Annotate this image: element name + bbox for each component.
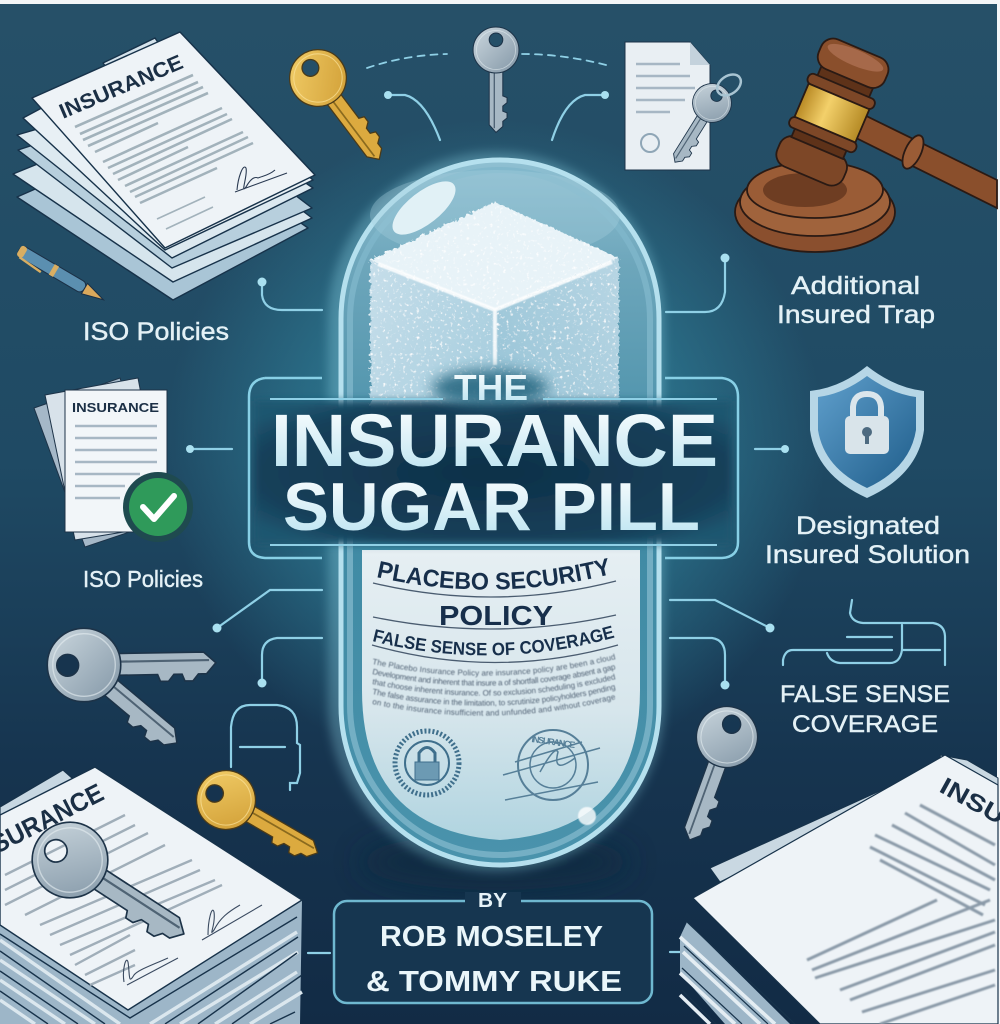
author panel: & TOMMY RUKE [366,966,622,998]
connector end dots [186,91,789,690]
icon: insurance document with check [34,378,193,547]
label: Additional Insured Trap [777,272,935,329]
label: Additional Insured Trap: Insured Trap [777,301,935,329]
label heading: policy: POLICY [439,600,553,631]
label: Designated Insured Solution: Insured Solution [765,541,970,569]
icon: insurance document with check: INSURANCE [72,400,159,415]
icon: silver key right [661,698,766,850]
highlight on glass [384,172,464,244]
stamp seal [395,731,459,795]
icon: silver key top [473,27,519,132]
icon: gold key lower [186,760,332,878]
label: Additional Insured Trap: Additional [791,272,920,300]
author panel [334,890,652,1003]
policy body text: The false assurance in the limitation, to scrutinize policyholders pending [372,684,616,707]
shadow under pill [360,834,630,890]
title panel [249,367,738,558]
icon: pen [15,245,106,307]
icon: document with key [625,42,745,173]
author panel: ROB MOSELEY [380,921,603,953]
icon: gavel [735,34,997,252]
policy body text: that choose inherent insurance. Of so exclusion scheduling is excluded [372,673,616,696]
icon: shield with lock [810,366,924,498]
policy body text: The Placebo Insurance Policy are insurance policy are been a cloud [372,653,616,678]
label: ISO Policies 1: ISO Policies [83,318,229,346]
glass sparkle [578,807,596,825]
stamp insurance signature [503,730,600,800]
title: THE: THE [454,367,528,408]
document stack: bottom left [0,767,302,1024]
heading: INSU: INSU [935,773,1000,830]
icon: silver keys left [36,617,217,769]
label: False Sense Coverage [780,681,950,738]
policy body text: on to the insurance insufficient and unfunded and without coverage [372,694,616,716]
author panel: BY [478,890,508,912]
label heading: placebo security: PLACEBO SECURITY [378,558,608,590]
title: SUGAR PILL: SUGAR PILL [283,469,700,545]
sugar cube [370,202,619,520]
label: ISO Policies 2: ISO Policies [83,566,203,592]
heading: INSURANCE: INSURANCE [56,51,186,124]
connector lines [190,54,945,953]
document stack: bottom right [680,755,1000,1024]
icon: gold key top left [278,38,402,176]
document stack: top left [13,32,315,300]
title: INSURANCE: INSURANCE [271,399,718,482]
policy label [362,550,640,840]
policy body text [372,653,616,716]
policy body text: Development and inherent that insure a of shortfall coverage absent a gap [372,664,616,686]
central pill [324,148,668,877]
label: False Sense Coverage: FALSE SENSE [780,681,950,708]
label heading: false sense of coverage: FALSE SENSE OF COVERAGE [373,626,614,656]
label: Designated Insured Solution: Designated [796,512,940,540]
label: Designated Insured Solution [765,512,970,569]
stamp insurance signature: INSURANCE [531,734,576,750]
label: False Sense Coverage: COVERAGE [792,711,938,738]
dome reflection [370,170,620,260]
